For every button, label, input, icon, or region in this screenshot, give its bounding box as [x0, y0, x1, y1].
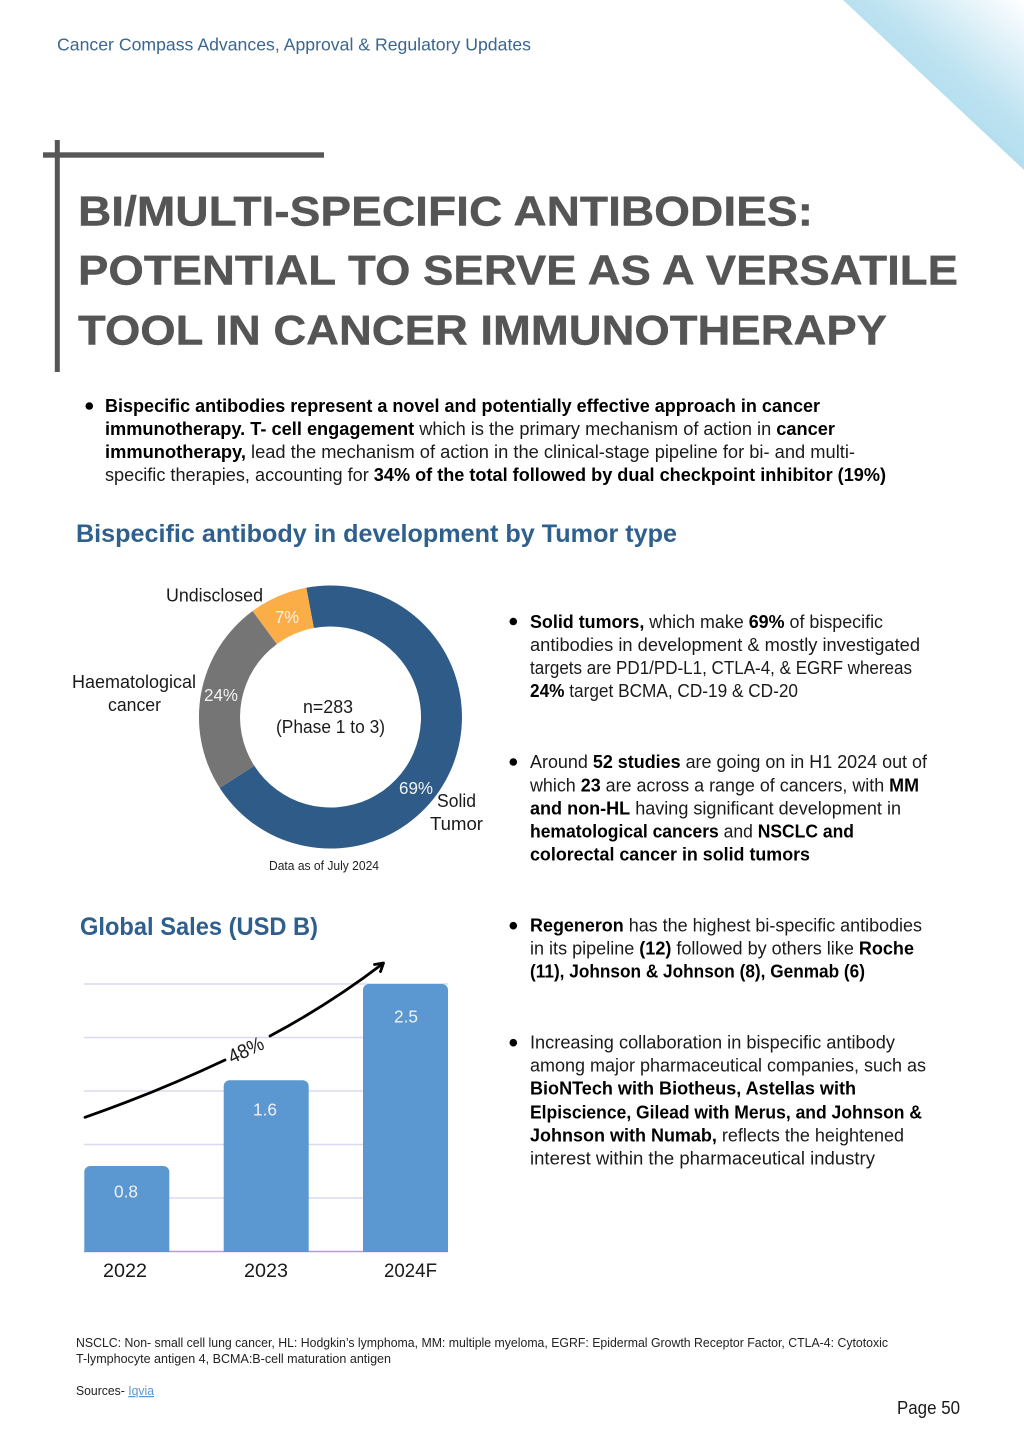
bar 2024F — [363, 984, 448, 1252]
right column bullets: sales and collaboration: BioNTech with Biotheus, Astellas with — [530, 1079, 856, 1099]
heading: global sales: Global Sales (USD B) — [80, 913, 318, 941]
right column bullets: sales and collaboration: Johnson with Numab, reflects the heightened — [530, 1126, 904, 1146]
heading: tumor type: Bispecific antibody in development by Tumor type — [76, 520, 677, 548]
right column bullets: sales and collaboration: Regeneron has the highest bi-specific antibodies — [530, 916, 922, 936]
donut labels: n=283 — [303, 697, 353, 717]
segment: solid tumor — [220, 586, 462, 849]
right column bullets: tumor type: Solid tumors, which make 69% of bispecific — [530, 612, 883, 632]
donut labels — [72, 586, 483, 873]
donut labels: 7% — [275, 607, 299, 627]
right column bullets: tumor type — [510, 612, 928, 865]
right column bullets: sales and collaboration: in its pipeline (12) followed by others like Roche — [530, 939, 914, 959]
title — [78, 188, 958, 354]
segment: haematological — [199, 611, 277, 788]
growth label: 48% — [225, 1033, 268, 1069]
intro bullet: immunotherapy. T- cell engagement which is the primary mechanism of action in cancer — [105, 419, 835, 439]
year axis labels: 2022 — [103, 1261, 147, 1282]
donut labels: Tumor — [430, 814, 483, 834]
growth arrow — [85, 963, 384, 1117]
intro bullet: specific therapies, accounting for 34% of the total followed by dual checkpoint inhibitor (19%) — [105, 465, 886, 485]
bar 2023 — [224, 1080, 309, 1252]
right column bullets: sales and collaboration: Elpiscience, Gilead with Merus, and Johnson & — [530, 1102, 922, 1122]
right column bullets: tumor type: targets are PD1/PD-L1, CTLA-4, & EGRF whereas — [530, 658, 912, 678]
donut chart — [72, 586, 483, 873]
bar values: 2.5 — [394, 1006, 418, 1026]
right column bullets: tumor type: colorectal cancer in solid tumors — [530, 845, 810, 865]
right column bullets: tumor type: and non-HL having significant development in — [530, 799, 901, 819]
right column bullets: sales and collaboration: Increasing collaboration in bispecific antibody — [530, 1033, 895, 1053]
bar values: 1.6 — [253, 1100, 277, 1120]
donut labels: cancer — [108, 695, 161, 715]
year axis labels: 2024F — [384, 1261, 437, 1282]
footnote: T-lymphocyte antigen 4, BCMA:B-cell maturation antigen — [76, 1352, 391, 1366]
corner decoration — [843, 0, 1024, 170]
donut labels: Undisclosed — [166, 586, 263, 606]
bar values — [114, 1006, 418, 1202]
title: TOOL IN CANCER IMMUNOTHERAPY — [78, 306, 887, 354]
donut labels: Data as of July 2024 — [269, 859, 379, 873]
segment: undisclosed — [253, 588, 314, 644]
right column bullets: tumor type: antibodies in development & mostly investigated — [530, 635, 920, 655]
right column bullets: tumor type: 24% target BCMA, CD-19 & CD-20 — [530, 681, 798, 701]
title: BI/MULTI-SPECIFIC ANTIBODIES: — [78, 188, 813, 234]
footnote: Sources- Iqvia — [76, 1384, 154, 1398]
title: POTENTIAL TO SERVE AS A VERSATILE — [78, 246, 958, 294]
intro bullet: immunotherapy, lead the mechanism of action in the clinical-stage pipeline for bi- and multi- — [105, 442, 855, 462]
right column bullets: sales and collaboration: (11), Johnson & Johnson (8), Genmab (6) — [530, 962, 865, 982]
bar values: 0.8 — [114, 1182, 138, 1202]
right column bullets: sales and collaboration: interest within the pharmaceutical industry — [530, 1149, 875, 1169]
donut labels: 69% — [399, 778, 433, 798]
donut labels: (Phase 1 to 3) — [276, 717, 385, 737]
donut labels: Haematological — [72, 672, 196, 692]
donut labels: 24% — [204, 685, 238, 705]
title bracket — [43, 140, 324, 372]
footnote: NSCLC: Non- small cell lung cancer, HL: Hodgkin’s lymphoma, MM: multiple myeloma, EGRF: Epidermal Growth Receptor Factor, CTLA-4: Cytotoxic — [76, 1336, 888, 1350]
intro bullet: Bispecific antibodies represent a novel and potentially effective approach in cancer — [105, 396, 820, 416]
intro bullet — [86, 396, 886, 485]
right column bullets: sales and collaboration: among major pharmaceutical companies, such as — [530, 1056, 926, 1076]
page header: Cancer Compass Advances, Approval & Regulatory Updates — [57, 34, 531, 54]
right column bullets: tumor type: Around 52 studies are going on in H1 2024 out of — [530, 752, 928, 772]
footnote — [76, 1336, 888, 1398]
right column bullets: sales and collaboration — [510, 916, 926, 1169]
bar chart: global sales — [84, 984, 448, 1282]
donut labels: Solid — [437, 791, 476, 811]
right column bullets: tumor type: which 23 are across a range of cancers, with MM — [529, 776, 919, 796]
bar 2022 — [84, 1166, 169, 1252]
right column bullets: tumor type: hematological cancers and NSCLC and — [530, 822, 854, 842]
year axis labels — [103, 1261, 437, 1282]
page number: Page 50 — [897, 1398, 960, 1418]
year axis labels: 2023 — [244, 1261, 288, 1282]
